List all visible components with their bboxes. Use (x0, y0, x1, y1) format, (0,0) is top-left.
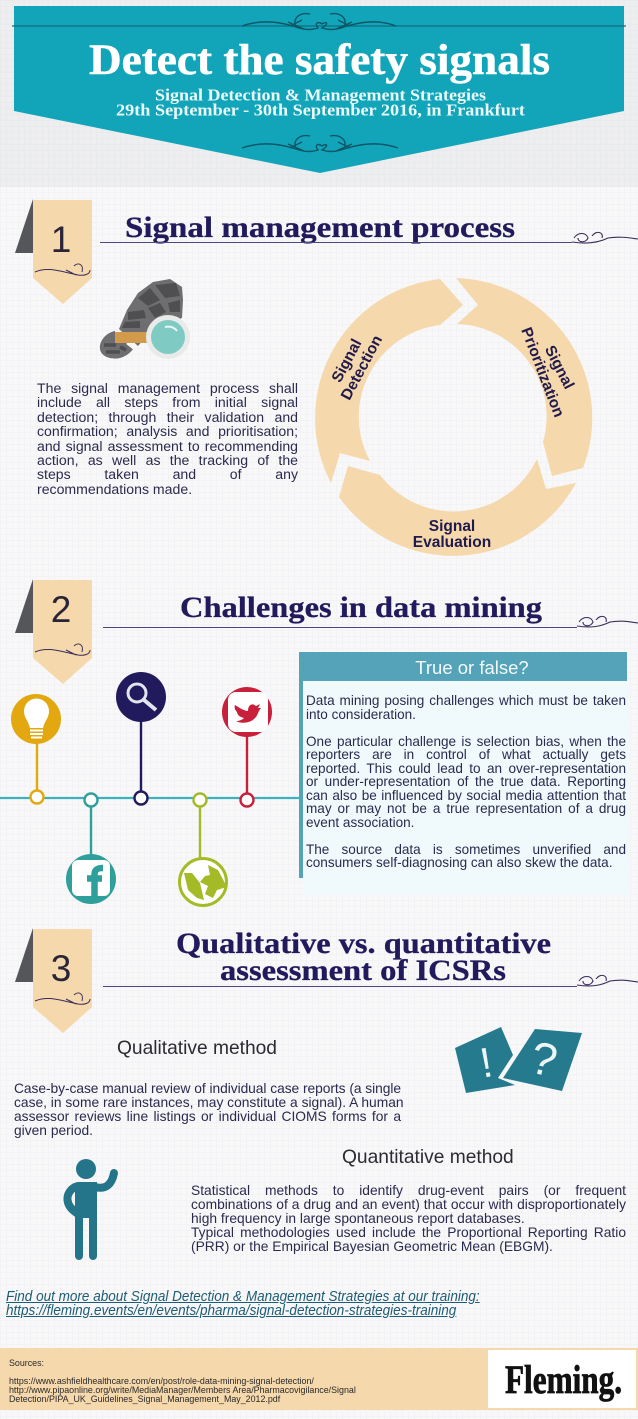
timeline pin: magnifier (116, 672, 166, 804)
text: quantitative description (191, 1183, 626, 1254)
text: quantitative description: (PRR) or the Empirical Bayesian Geometric Mean (EBGM). (191, 1239, 553, 1254)
text: sources: Sources: (9, 1358, 44, 1368)
section 3 badge (15, 928, 92, 1033)
timeline pin: globe (180, 794, 227, 906)
text: sources: http://www.pipaonline.org/write/MediaManager/Members Area/Pharmacovigilance/Signal (9, 1384, 356, 1394)
link: training call to action: Find out more about Signal Detection & Management Strategies at our training: (6, 1289, 480, 1305)
section 3 heading: assessment of ICSRs (220, 954, 506, 987)
text: signal management description: recommendations made. (37, 481, 192, 497)
text: signal management description: steps taken and of any (37, 466, 298, 482)
text: data mining challenges: The source data is sometimes unverified and (306, 842, 626, 856)
text: data mining challenges (306, 693, 626, 870)
cycle labels: Signal (329, 336, 365, 385)
icon: person waving (67, 1159, 114, 1256)
arrow: signal prioritization (456, 278, 592, 476)
text: data mining challenges: reporters are in control of what actually gets (306, 747, 626, 762)
text: data mining challenges: may or may not be a true representation of a drug (306, 801, 626, 816)
icon: exclamation and question cards: ? (525, 1031, 562, 1087)
fleming logo (488, 1350, 636, 1408)
section 3 badge: 3 (51, 948, 71, 989)
section 3 heading: Qualitative vs. quantitative (176, 927, 551, 960)
title: Detect the safety signals (89, 37, 550, 84)
timeline pin: twitter (222, 687, 272, 806)
text: signal management description: confirmation; analysis and prioritisation; (37, 423, 298, 439)
heading: qualitative method: Qualitative method (117, 1038, 277, 1059)
text: qualitative description (14, 1081, 404, 1138)
cycle labels: Evaluation (413, 534, 491, 551)
footer band (0, 1348, 638, 1410)
section 1 badge (15, 199, 92, 304)
text: data mining challenges: One particular challenge is selection bias, when the (306, 734, 626, 748)
link: training call to action: https://fleming.events/en/events/pharma/signal-detection-strategies-training (6, 1303, 456, 1319)
timeline pin: facebook (66, 794, 116, 904)
text: signal management description: action, as well as the tracking of the (37, 452, 298, 468)
cycle labels: Prioritization (517, 325, 567, 420)
section 3 heading (103, 927, 638, 987)
header banner (12, 6, 626, 173)
text: qualitative description: given period. (14, 1123, 93, 1138)
cycle labels: Signal (429, 518, 475, 535)
text: quantitative description: Statistical methods to identify drug-event pairs (or frequent (191, 1183, 626, 1198)
panel: true or false: True or false? (415, 657, 529, 678)
text: sources: https://www.ashfieldhealthcare.com/en/post/role-data-mining-signal-detection/ (9, 1376, 314, 1386)
section 1 badge: 1 (51, 219, 71, 260)
icon: exclamation and question cards (455, 1027, 582, 1093)
text: signal management description: include all steps from initial signal (37, 394, 298, 410)
text: data mining challenges: consumers self-diagnosing can also skew the data. (306, 855, 612, 870)
icon: shoe print with magnifier (100, 279, 190, 359)
section 2 badge (15, 579, 92, 684)
text: data mining challenges: event association. (306, 814, 414, 830)
section 2 heading (103, 591, 638, 628)
text: signal management description: and signal assessment to recommending (37, 438, 298, 454)
panel: true or false (299, 652, 630, 895)
cycle labels: Detection (338, 333, 386, 403)
cycle labels (329, 325, 577, 551)
text: signal management description (37, 380, 298, 497)
text: data mining challenges: can also be influenced by social media attention that (306, 788, 626, 802)
text: signal management description: detection; through their validation and (37, 409, 298, 425)
text: quantitative description: combinations of a drug and an event) that occur with disproportionately (191, 1197, 626, 1212)
link: training call to action (6, 1289, 480, 1319)
section 2 heading: Challenges in data mining (180, 591, 542, 624)
text: quantitative description: Typical methodologies used include the Proportional Reporting Ratio (191, 1225, 626, 1240)
icon: exclamation and question cards: ! (476, 1038, 496, 1087)
timeline pin: light bulb (11, 694, 61, 804)
text: sources: Detection/PIPA_UK_Guidelines_Signal_Management_May_2012.pdf (9, 1394, 280, 1404)
timeline axis (0, 797, 300, 799)
cycle labels: Signal (541, 343, 577, 392)
subtitle (116, 86, 526, 120)
text: qualitative description: assessor reviews line listings or individual CIOMS forms for a (14, 1109, 401, 1124)
cycle diagram: signal management (315, 278, 592, 556)
text: quantitative description: high frequency in large spontaneous report databases. (191, 1211, 525, 1226)
subtitle: Signal Detection & Management Strategies (155, 86, 487, 104)
text: data mining challenges: into consideration. (306, 706, 416, 722)
text: signal management description: The signal management process shall (37, 380, 298, 396)
section 1 heading: Signal management process (125, 211, 515, 244)
arrow: signal detection (315, 279, 463, 483)
section 1 heading (100, 211, 638, 244)
text: qualitative description: case, in some rare instances, may constitute a signal). A human (14, 1095, 404, 1110)
text: sources (9, 1358, 356, 1404)
section 2 badge: 2 (51, 589, 71, 630)
text: data mining challenges: Data mining posing challenges which must be taken (306, 693, 626, 708)
text: data mining challenges: reported. This could lead to an over-representation (306, 760, 626, 776)
subtitle: 29th September - 30th September 2016, in Frankfurt (116, 100, 526, 120)
arrow: signal evaluation (339, 459, 576, 556)
text: qualitative description: Case-by-case manual review of individual case reports (a single (14, 1081, 401, 1096)
text: data mining challenges: or under-representation of the true data. Reporting (306, 774, 626, 789)
heading: quantitative method: Quantitative method (342, 1147, 514, 1168)
